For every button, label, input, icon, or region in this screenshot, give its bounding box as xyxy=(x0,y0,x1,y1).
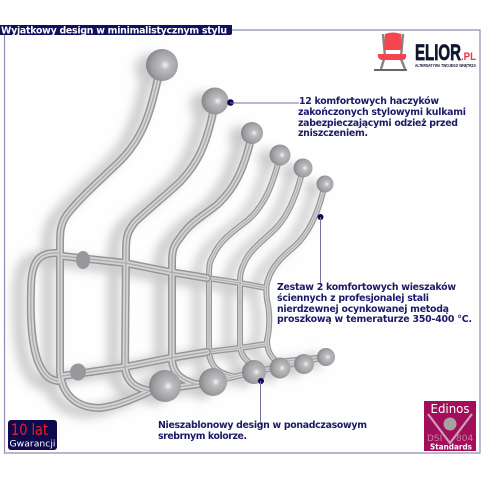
callout text: zakończonych stylowymi kulkami xyxy=(298,107,466,118)
callout line and dot xyxy=(318,214,324,285)
rack tubes xyxy=(31,78,326,408)
badge: Edinos standards: Standards xyxy=(430,442,472,452)
callout line and dot xyxy=(227,99,299,106)
rack shadows xyxy=(19,54,322,412)
callout: colour xyxy=(158,378,367,442)
logo wordmark: ELIOR xyxy=(415,40,461,65)
logo .pl: .PL xyxy=(461,51,476,63)
callout: hooks xyxy=(227,96,466,139)
callout text: srebrnym kolorze. xyxy=(158,431,247,442)
callout text: Nieszablonowy design w ponadczasowym xyxy=(158,420,367,431)
badge: Edinos standards: DSI xyxy=(427,434,442,444)
callout text: proszkową w temeraturze 350-400 °C. xyxy=(277,314,472,325)
badge: 10 years warranty: 10 lat xyxy=(11,420,48,439)
badge: Edinos standards: 804 xyxy=(456,434,473,444)
callout text: Zestaw 2 komfortowych wieszaków xyxy=(277,282,456,293)
badge: 10 years warranty: Gwarancji xyxy=(10,440,55,450)
product: coat rack xyxy=(19,49,335,412)
callout line and dot xyxy=(258,378,264,425)
wall collars xyxy=(70,251,90,380)
callout: material xyxy=(277,214,472,325)
title banner: Wyjatkowy design w minimalistycznym stylu xyxy=(1,26,227,36)
badge: Edinos standards xyxy=(424,401,476,452)
callout text: nierdzewnej ocynkowanej metodą xyxy=(277,304,449,315)
callout text: zniszczeniem. xyxy=(298,128,368,139)
callout text: zabezpieczającymi odzież przed xyxy=(298,118,458,129)
badge: 10 years warranty xyxy=(8,420,57,450)
callout text: ściennych z profesjonalej stali xyxy=(277,293,429,304)
badge: Edinos standards: Edinos xyxy=(430,401,470,416)
callout text: 12 komfortowych haczyków xyxy=(299,96,439,107)
logo: Elior xyxy=(374,32,477,71)
hook balls xyxy=(146,49,335,402)
icon: red chair xyxy=(374,32,407,71)
